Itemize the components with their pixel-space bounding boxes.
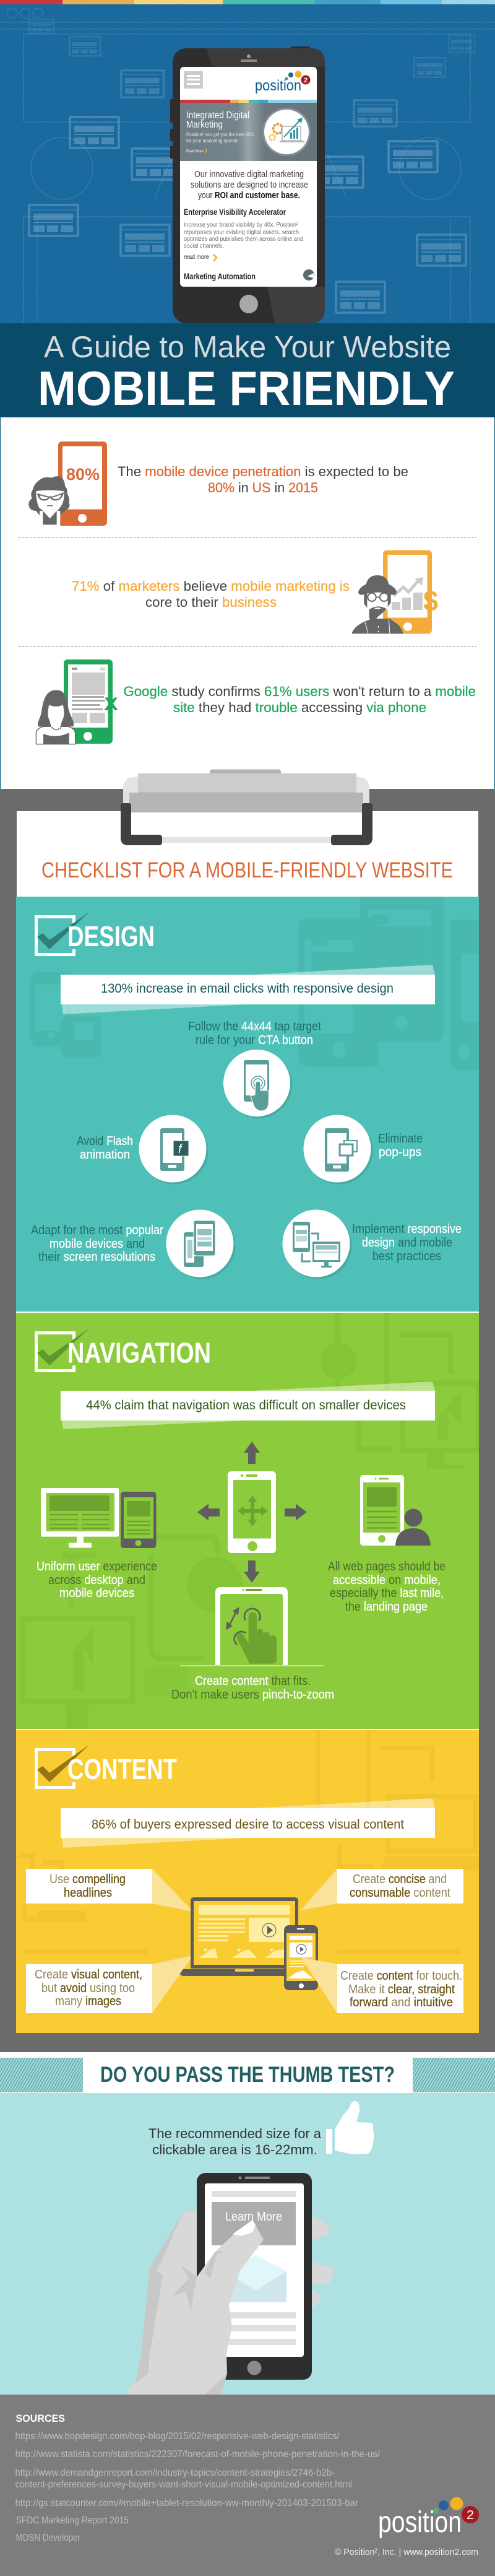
tip: responsive design: [282, 1210, 462, 1279]
screen banner: [180, 103, 317, 161]
callout: 130 percent: [61, 965, 435, 1014]
stat text: core to their business: [145, 594, 277, 610]
logo: position2: [255, 71, 311, 94]
box: visual content: but avoid using too: [41, 1982, 135, 1995]
tip: accessible pages: All web pages should be: [328, 1560, 446, 1573]
hand: fingers behind phone: [312, 2216, 333, 2308]
tip: pop-ups: Eliminate: [378, 1132, 423, 1146]
heading: navigation: [36, 1328, 211, 1371]
screen colour strip: [180, 100, 317, 103]
thumb text: clickable area is 16-22mm.: [152, 2142, 317, 2157]
device: laptop: [152, 1869, 337, 2013]
thumb text: The recommended size for a: [148, 2126, 322, 2141]
tip: responsive design: design and mobile: [362, 1236, 452, 1250]
sources list: [15, 2431, 381, 2543]
box: headlines: [26, 1869, 152, 1904]
callout: 44 percent: 44% claim that navigation was difficult on smaller devices: [86, 1398, 406, 1412]
tip: popular devices: their screen resolutions: [38, 1250, 155, 1264]
callout: 130 percent: 130% increase in email clicks with responsive design: [101, 981, 394, 996]
screen article text: [184, 207, 314, 281]
stat text: 80% in US in 2015: [208, 480, 318, 495]
button: learn more: [212, 2202, 296, 2245]
title band: A Guide to Make Your Website: [44, 331, 451, 364]
tip: accessible pages: accessible on mobile,: [333, 1573, 441, 1587]
screen article text: Enterprise Visibility Accelerator: [184, 207, 286, 217]
stat text: 71% of marketers believe mobile marketing is: [72, 578, 350, 594]
phone mockup: [170, 46, 325, 323]
stat text: [118, 464, 408, 495]
panel: design: [16, 892, 479, 1313]
screen banner: for your marketing spends: [186, 138, 238, 144]
tip: flash: [77, 1115, 208, 1184]
box: visual content: many images: [55, 1995, 121, 2008]
icon: woman with glasses: [28, 476, 69, 524]
icon: envelope: [225, 2255, 286, 2302]
tip: accessible pages: especially the last mile,: [330, 1586, 444, 1600]
heading: content: [36, 1744, 177, 1787]
sources list: SFDC Marketing Report 2015: [16, 2515, 129, 2526]
tip: uniform experience: across desktop and: [48, 1573, 145, 1587]
screen intro text: your ROI and customer base.: [198, 190, 300, 201]
heading: thumb test: DO YOU PASS THE THUMB TEST?: [100, 2063, 395, 2087]
callout: 86 percent: 86% of buyers expressed desire to access visual content: [92, 1817, 404, 1832]
screen article text: Marketing Automation: [184, 271, 256, 281]
screen banner: Read More: [186, 149, 204, 154]
icon: man with hat: [351, 575, 403, 633]
stat text: site they had trouble accessing via phone: [173, 700, 426, 715]
tip: pinch to zoom: Create content that fits.: [195, 1674, 311, 1688]
tip: tap target: [188, 1020, 321, 1118]
tip: popular devices: Adapt for the most popular: [31, 1224, 163, 1237]
screen article text: optimizes and publishes them across online and: [184, 235, 303, 243]
tip: flash: animation: [80, 1148, 130, 1162]
screen intro text: [191, 169, 308, 201]
tip: uniform experience: Uniform user experience: [37, 1560, 157, 1573]
stat text: Google study confirms 61% users won't return to a mobile: [124, 684, 476, 699]
box: touch content: Create content for touch.: [340, 1969, 462, 1983]
center phone: [228, 1471, 276, 1553]
title band: MOBILE FRIENDLY: [38, 361, 455, 416]
tip: pop-ups: [303, 1115, 423, 1184]
panel: content: [16, 1730, 479, 2033]
sources list: content-preferences-survey-buyers-want-short-visual-mobile-optimized-content.html: [15, 2479, 352, 2490]
box: headlines: Use compelling: [50, 1873, 126, 1886]
stat: 61 percent: [36, 659, 476, 744]
screen article text: Increase your brand visibility by 40x. Position²: [184, 221, 298, 228]
stat: 80 percent: 80%: [66, 465, 100, 484]
box: concise content: consumable content: [350, 1886, 450, 1900]
panel: blue hero background: [0, 4, 495, 324]
tip: popular devices: mobile devices and: [50, 1237, 145, 1251]
top colour strip: [0, 0, 495, 4]
screen intro text: solutions are designed to increase: [191, 180, 308, 190]
thumb text: [148, 2126, 322, 2157]
panel: footer: [0, 2395, 495, 2576]
logo: position2: 2: [304, 77, 308, 84]
screen banner: Integrated Digital: [186, 110, 249, 121]
tip: responsive design: Implement responsive: [352, 1222, 462, 1236]
tip: pinch to zoom: [171, 1587, 334, 1702]
tip: uniform experience: [37, 1488, 157, 1600]
logo: position2: position: [255, 77, 301, 94]
tip: flash: Avoid Flash: [77, 1134, 133, 1148]
tip: flash: f: [178, 1142, 183, 1156]
tip: pinch to zoom: Don't make users pinch-to-zoom: [171, 1688, 334, 1702]
tip: uniform experience: mobile devices: [59, 1586, 134, 1600]
panel: navigation: [16, 1313, 479, 1730]
box: headlines: headlines: [64, 1886, 112, 1900]
hand holding phone: [126, 2209, 264, 2395]
stat: 71 percent: [72, 550, 438, 634]
stat text: [124, 684, 476, 715]
sources list: https://www.bopdesign.com/bop-blog/2015/02/responsive-web-design-statistics/: [15, 2431, 340, 2442]
heading: design: [36, 912, 155, 955]
logo: position2: 2: [467, 2509, 474, 2522]
screen article text: read more: [184, 253, 209, 261]
icon: thumbs up: [326, 2101, 374, 2154]
box: visual content: Create visual content,: [35, 1968, 142, 1982]
icon: pinch hand: [226, 1607, 277, 1664]
icon: growth chart: $: [423, 585, 438, 617]
box: visual content: [26, 1964, 152, 2013]
copyright: © Position², Inc. | www.position2.com: [335, 2547, 478, 2557]
tip: pop-ups: pop-ups: [379, 1146, 421, 1159]
title band: [0, 323, 495, 417]
menu icon: [184, 71, 203, 89]
stat: 61 percent: X: [104, 694, 118, 715]
tip: responsive design: best practices: [372, 1250, 441, 1263]
box: concise content: [337, 1869, 463, 1904]
tip: tap target: rule for your CTA button: [196, 1033, 313, 1047]
callout: 86 percent: [61, 1798, 435, 1848]
panel: statistics: [0, 417, 495, 789]
box: touch content: forward and intuitive: [350, 1996, 453, 2009]
screen intro text: Our innovative digital marketing: [194, 169, 304, 180]
screen article text: social channels.: [184, 242, 224, 250]
box: concise content: Create concise and: [353, 1873, 447, 1886]
tip: popular devices: [31, 1210, 235, 1279]
panel: thumb test: [0, 2052, 495, 2395]
tip: accessible pages: [328, 1475, 446, 1614]
device: phone: [284, 1925, 337, 2013]
box: touch content: Make it clear, straight: [348, 1983, 455, 1996]
box: touch content: [337, 1964, 463, 2013]
stat text: The mobile device penetration is expected to be: [118, 464, 408, 479]
icon: woman: [36, 690, 75, 744]
panel: clipboard: [0, 769, 495, 2052]
sources list: MDSN Developer: [16, 2533, 81, 2543]
heading: content: CONTENT: [67, 1753, 177, 1785]
stat text: [72, 578, 350, 610]
stat: 80 percent: [28, 442, 408, 526]
heading: sources: SOURCES: [16, 2413, 65, 2424]
screen banner: Marketing: [186, 120, 223, 130]
callout: 44 percent: [61, 1382, 435, 1429]
arrows: [197, 1442, 307, 1583]
screen banner: Position² can get you the best ROI: [186, 132, 254, 137]
sources list: http://www.demandgenreport.com/industry-topics/content-strategies/2746-b2b-: [15, 2468, 335, 2478]
button: learn more: Learn More: [225, 2210, 282, 2224]
clipboard clip: [121, 769, 372, 845]
logo: position2: position: [378, 2506, 462, 2539]
icon: gears and growth chart: [270, 118, 304, 142]
icon: growth chart: [392, 577, 438, 617]
tip: tap target: Follow the 44x44 tap target: [188, 1020, 321, 1033]
heading: design: DESIGN: [67, 920, 155, 952]
sources list: http://www.statista.com/statistics/222307/forecast-of-mobile-phone-penetration-in-the-us/: [15, 2449, 381, 2460]
tip: accessible pages: the landing page: [345, 1600, 428, 1614]
phone with content: [197, 2173, 312, 2380]
heading: navigation: NAVIGATION: [67, 1336, 211, 1368]
screen article text: repurposes your existing digital assets, search: [184, 228, 299, 236]
sources list: http://gs.statcounter.com/#mobile+tablet-resolution-ww-monthly-201403-201503-bar: [15, 2498, 359, 2509]
